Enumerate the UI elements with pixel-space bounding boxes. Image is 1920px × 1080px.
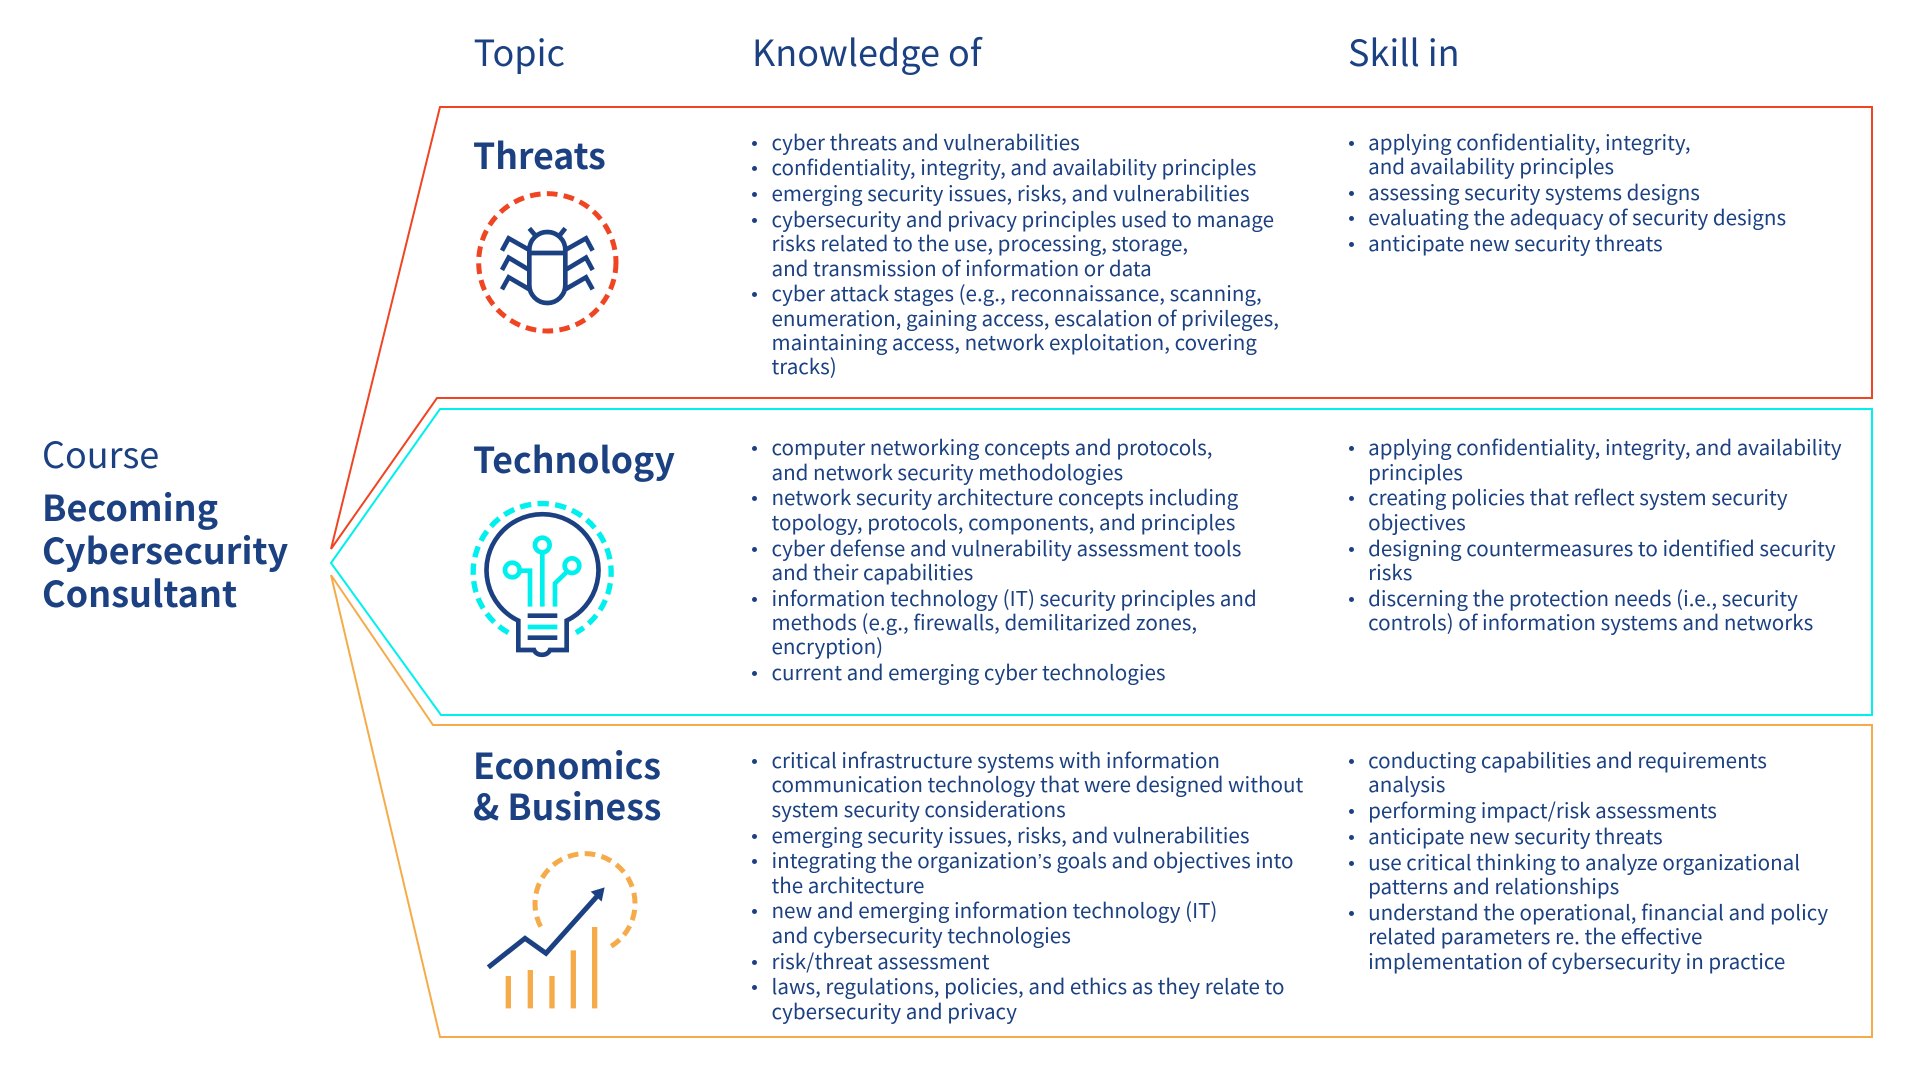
knowledge list: Economics and Business: critical infrastructure systems with information <box>772 744 1220 774</box>
skill list: Threats: applying confidentiality, integrity, <box>1368 126 1691 156</box>
column heading: Skill in: Skill in <box>1348 25 1460 77</box>
skill list: Economics and Business: conducting capabilities and requirements <box>1368 744 1767 774</box>
course label: Course <box>42 427 159 479</box>
course title block <box>42 427 288 618</box>
knowledge list: Technology: and network security methodologies <box>772 456 1123 486</box>
knowledge list: Economics and Business: the architecture <box>772 869 924 899</box>
knowledge list: Economics and Business: integrating the organization’s goals and objectives into <box>772 844 1293 874</box>
knowledge list: Technology: methods (e.g., firewalls, demilitarized zones, <box>772 606 1197 636</box>
knowledge list: Economics and Business: new and emerging information technology (IT) <box>772 894 1217 924</box>
icon: light bulb <box>470 500 614 658</box>
skill list: Economics and Business: related parameters re. the effective <box>1368 920 1702 950</box>
panel: Technology <box>330 408 1873 716</box>
skill list: Economics and Business: implementation of cybersecurity in practice <box>1368 945 1785 975</box>
course name <box>42 480 288 618</box>
knowledge list: Economics and Business: emerging security issues, risks, and vulnerabilities <box>772 819 1249 849</box>
knowledge list: Threats <box>752 126 1279 380</box>
course name: Consultant <box>42 566 237 618</box>
outline: Technology <box>330 408 1873 716</box>
skill list: Threats: and availability principles <box>1368 150 1614 180</box>
outline: Economics and Business <box>330 574 1873 1038</box>
skill list: Technology: controls) of information systems and networks <box>1368 606 1813 636</box>
knowledge list: Threats: cybersecurity and privacy principles used to manage <box>772 203 1274 233</box>
skill list: Technology: applying confidentiality, integrity, and availability <box>1368 431 1842 461</box>
heading: Economics and Business: Economics <box>473 739 661 790</box>
icon: bug <box>476 191 618 334</box>
knowledge list: Technology: encryption) <box>772 630 883 660</box>
knowledge list: Technology: current and emerging cyber technologies <box>772 656 1166 686</box>
knowledge list: Threats: enumeration, gaining access, escalation of privileges, <box>772 302 1279 332</box>
course name: Becoming <box>42 480 218 532</box>
knowledge list: Technology: topology, protocols, components, and principles <box>772 506 1235 536</box>
panel: Threats <box>330 106 1873 550</box>
skill list: Threats <box>1349 126 1786 257</box>
skill list: Technology: creating policies that reflect system security <box>1368 481 1788 511</box>
skill list: Threats: anticipate new security threats <box>1368 227 1663 257</box>
skill list: Economics and Business: anticipate new security threats <box>1368 820 1663 850</box>
skill list: Technology: principles <box>1368 456 1463 486</box>
heading: Technology: Technology <box>473 433 675 484</box>
knowledge list: Technology: network security architecture concepts including <box>772 481 1238 511</box>
heading: Economics and Business <box>473 739 661 831</box>
heading: Threats: Threats <box>473 129 606 180</box>
skill list: Technology: designing countermeasures to identified security <box>1368 532 1836 562</box>
skill list: Economics and Business: patterns and relationships <box>1368 870 1619 900</box>
skill list: Threats: assessing security systems designs <box>1368 176 1700 206</box>
skill list: Economics and Business: performing impact/risk assessments <box>1368 794 1717 824</box>
knowledge list: Threats: cyber attack stages (e.g., reconnaissance, scanning, <box>772 277 1262 307</box>
knowledge list: Economics and Business: and cybersecurity technologies <box>772 919 1071 949</box>
knowledge list: Threats: confidentiality, integrity, and availability principles <box>772 151 1256 181</box>
knowledge list: Technology: cyber defense and vulnerability assessment tools <box>772 532 1241 562</box>
skill list: Economics and Business: analysis <box>1368 768 1445 798</box>
column heading: Knowledge of: Knowledge of <box>752 25 982 77</box>
knowledge list: Economics and Business: communication technology that were designed without <box>772 768 1303 798</box>
heading: Economics and Business: & Business <box>473 780 661 831</box>
skill list: Economics and Business: use critical thinking to analyze organizational <box>1368 846 1800 876</box>
column heading: Topic: Topic <box>474 25 565 77</box>
outline: Threats <box>330 106 1873 550</box>
course name: Cybersecurity <box>42 523 288 575</box>
icon: growth chart <box>486 851 638 1008</box>
knowledge list: Economics and Business: cybersecurity and privacy <box>772 995 1017 1025</box>
knowledge list: Economics and Business: risk/threat assessment <box>772 945 990 975</box>
knowledge list: Technology: computer networking concepts and protocols, <box>772 431 1212 461</box>
knowledge list: Economics and Business <box>752 744 1303 1025</box>
knowledge list: Threats: risks related to the use, processing, storage, <box>772 227 1188 257</box>
knowledge list: Threats: maintaining access, network exploitation, covering <box>772 326 1257 356</box>
panel: Economics and Business <box>330 574 1873 1038</box>
skill list: Technology: risks <box>1368 556 1412 586</box>
skill list: Technology <box>1349 431 1842 636</box>
knowledge list: Technology <box>752 431 1257 686</box>
knowledge list: Economics and Business: system security considerations <box>772 793 1066 823</box>
knowledge list: Technology: information technology (IT) security principles and <box>772 582 1257 612</box>
skill list: Threats: evaluating the adequacy of security designs <box>1368 201 1786 231</box>
skill list: Technology: objectives <box>1368 506 1466 536</box>
knowledge list: Threats: cyber threats and vulnerabilities <box>772 126 1080 156</box>
skill list: Economics and Business: understand the operational, financial and policy <box>1368 896 1828 926</box>
skill list: Technology: discerning the protection needs (i.e., security <box>1368 582 1798 612</box>
knowledge list: Economics and Business: laws, regulations, policies, and ethics as they relate to <box>772 970 1284 1000</box>
knowledge list: Technology: and their capabilities <box>772 556 973 586</box>
knowledge list: Threats: tracks) <box>772 350 837 380</box>
knowledge list: Threats: and transmission of information or data <box>772 252 1152 282</box>
knowledge list: Threats: emerging security issues, risks, and vulnerabilities <box>772 177 1249 207</box>
skill list: Economics and Business <box>1349 744 1828 975</box>
